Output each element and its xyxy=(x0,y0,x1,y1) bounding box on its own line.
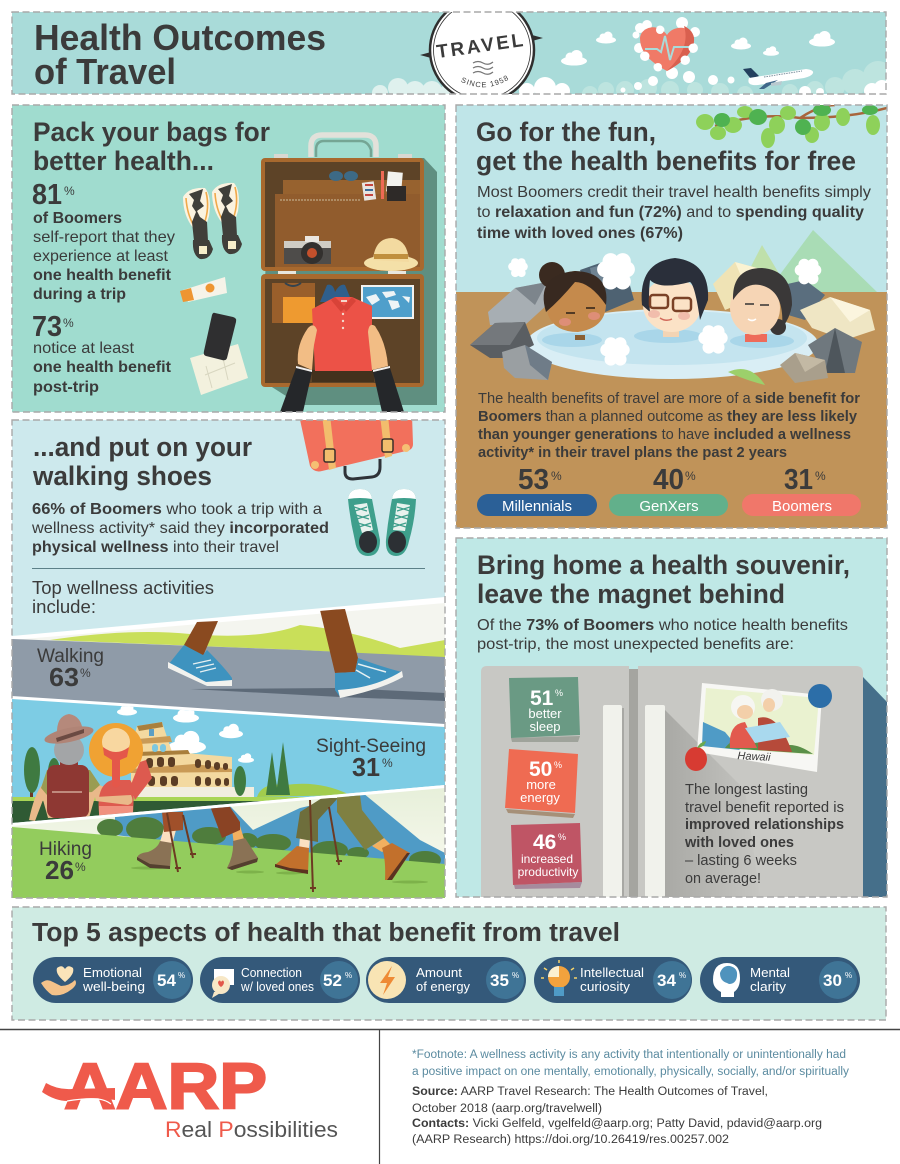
tourist couple xyxy=(29,714,152,821)
red polo xyxy=(312,297,372,371)
sticky: 46 percent increased productivity: increased xyxy=(521,852,573,866)
panel: top 5 aspects xyxy=(12,907,886,1020)
world map xyxy=(361,285,414,319)
hat xyxy=(364,257,418,271)
icon: blue magnet xyxy=(808,684,832,708)
heading: ...and put on your xyxy=(33,432,252,462)
heading xyxy=(33,117,270,176)
bushes xyxy=(97,817,441,864)
stat: 81 percent during a trip xyxy=(32,179,175,303)
walker left leg and shoe xyxy=(184,621,218,656)
icon: swim fins xyxy=(183,183,242,259)
text: relaxation and fun: to relaxation and fun (72%) and to spending quality xyxy=(477,204,864,221)
label: sight-seeing 31 percent: % xyxy=(382,756,393,770)
stat: genxers xyxy=(609,464,728,516)
title xyxy=(34,17,326,92)
icon: lightning bolt xyxy=(368,961,406,999)
text: unexpected benefits: Of the 73% of Boomers who notice health benefits xyxy=(477,617,848,634)
pill: amount of energy: of energy xyxy=(416,979,470,994)
pill: intellectual curiosity: curiosity xyxy=(580,979,631,994)
pill: intellectual curiosity: Intellectual xyxy=(580,965,644,980)
seated couple xyxy=(731,695,755,719)
sticky: 50 percent more energy: more xyxy=(526,777,556,792)
text: unexpected benefits xyxy=(477,617,848,653)
footnote: a positive impact on one mentally, emotionally, physically, socially, and/or spiritually xyxy=(412,1066,849,1078)
stat: boomers: 31 xyxy=(784,464,813,496)
label: hiking 26 percent: Hiking xyxy=(39,839,92,860)
stat: 81 percent during a trip: of Boomers xyxy=(33,210,122,227)
label: walking 63 percent: 63 xyxy=(49,662,79,692)
pill: emotional well-being: % xyxy=(178,971,185,980)
pill: mental clarity: Mental xyxy=(750,965,790,980)
pill: amount of energy: 35 xyxy=(490,971,509,990)
hiker trousers xyxy=(162,795,384,850)
icon: cloud heart xyxy=(632,17,700,72)
icon: sunscreen tube xyxy=(180,277,227,302)
sticky: 51 percent better sleep: better xyxy=(528,706,562,721)
sticky: 50 percent more energy: % xyxy=(554,760,562,770)
hiker skin and socks xyxy=(160,826,392,852)
stat: 81 percent during a trip: self-report that they xyxy=(33,229,175,246)
heading: walking shoes xyxy=(32,461,212,491)
panel: header banner xyxy=(11,11,887,95)
illustration: fridge xyxy=(481,666,887,897)
badge tagline: SINCE 1958 xyxy=(461,76,508,88)
stat: 81 percent during a trip: % xyxy=(64,184,75,198)
text: relaxation and fun: time with loved ones (67%) xyxy=(477,225,683,242)
pill: mental clarity xyxy=(700,957,860,1003)
stat: 73 percent post-trip: % xyxy=(63,316,74,330)
source and contacts: Contacts: Vicki Gelfeld, vgelfeld@aarp.org; Patty David, pdavid@aarp.org xyxy=(412,1118,822,1130)
text: physical wellness stat: 66% of Boomers who took a trip with a xyxy=(32,501,322,518)
icon: travel badge xyxy=(420,12,543,94)
heading xyxy=(32,432,252,491)
pill: amount of energy xyxy=(366,957,526,1003)
hands and sleeves xyxy=(298,325,317,370)
text: longest lasting benefit: with loved ones xyxy=(684,834,794,851)
sticky: 46 percent increased productivity xyxy=(511,823,582,889)
heading: Pack your bags for xyxy=(33,117,270,147)
stat: boomers: % xyxy=(815,469,826,483)
pill: intellectual curiosity: 34 xyxy=(657,971,676,990)
text: longest lasting benefit: – lasting 6 weeks xyxy=(685,852,797,869)
panel: walking shoes xyxy=(12,415,445,898)
label: hiking 26 percent: 26 xyxy=(45,855,74,885)
stat: genxers: GenXers xyxy=(639,498,699,515)
sticky: 50 percent more energy xyxy=(505,749,578,818)
shirt shadow xyxy=(312,370,374,382)
label: walking 63 percent xyxy=(37,646,104,692)
icon: speech bubble heart xyxy=(212,969,234,998)
icon: hand and heart xyxy=(41,966,76,995)
label: walking 63 percent: Walking xyxy=(37,646,104,667)
pill: amount of energy: Amount xyxy=(416,965,462,980)
illustration: hot spring xyxy=(456,104,887,528)
heading: get the health benefits for free xyxy=(476,146,856,176)
footnote xyxy=(412,1049,849,1078)
icon: airplane xyxy=(743,68,813,89)
foreground rocks right xyxy=(780,297,875,383)
stat: genxers: % xyxy=(685,469,696,483)
pill: intellectual curiosity: % xyxy=(679,971,686,980)
icon: head with brain xyxy=(713,963,740,997)
logo: AARP: AARP xyxy=(64,1050,267,1122)
label: hiking 26 percent xyxy=(39,839,92,885)
ground shadows xyxy=(131,866,428,884)
text: longest lasting benefit: The longest lasting xyxy=(685,781,808,798)
stat: 73 percent post-trip: 73 xyxy=(32,311,62,343)
text: side benefit: than younger generations to have included a wellness xyxy=(478,426,851,443)
stat: 81 percent during a trip: one health benefit xyxy=(33,267,172,284)
pill: connection with loved ones: w/ loved ones xyxy=(240,979,314,994)
stat: 73 percent post-trip: notice at least xyxy=(33,340,135,357)
label: walking 63 percent: % xyxy=(80,666,91,680)
icon: light bulb xyxy=(541,960,577,996)
stat: 73 percent post-trip xyxy=(32,311,172,396)
panel: go for the fun xyxy=(456,104,887,528)
icon: phone on map xyxy=(190,313,248,395)
text: physical wellness stat: physical wellness into their travel xyxy=(32,539,279,556)
pill: amount of energy: % xyxy=(512,971,519,980)
heading: better health... xyxy=(33,146,214,176)
stat: 81 percent during a trip: during a trip xyxy=(33,286,126,303)
label: sight-seeing 31 percent: 31 xyxy=(352,752,380,782)
sticky: 51 percent better sleep: % xyxy=(555,688,563,698)
pill: intellectual curiosity xyxy=(534,957,692,1003)
tree leaves xyxy=(696,104,887,148)
scene: sight-seeing band xyxy=(12,695,445,831)
pills, toothbrush, passport xyxy=(362,181,376,201)
source and contacts: (AARP Research) https://doi.org/10.26419/res.00257.002 xyxy=(412,1134,729,1146)
leaf xyxy=(728,369,765,385)
pill: connection with loved ones: 52 xyxy=(323,971,342,990)
sticky: 51 percent better sleep: 51 xyxy=(530,687,554,710)
trees xyxy=(24,742,350,799)
colosseum xyxy=(131,722,254,797)
label: hiking 26 percent: % xyxy=(75,860,86,874)
steam puffs xyxy=(508,258,528,277)
scene: hiking band xyxy=(12,785,445,898)
bather: woman xyxy=(730,268,792,342)
pill: emotional well-being: Emotional xyxy=(83,965,142,980)
caption: Hawaii xyxy=(737,750,771,764)
pill: connection with loved ones: % xyxy=(345,971,352,980)
pill: mental clarity: clarity xyxy=(750,979,787,994)
sticky: 51 percent better sleep: sleep xyxy=(529,719,561,734)
title: Health Outcomes xyxy=(34,17,326,58)
photo: Hawaii snapshot xyxy=(697,683,822,772)
label: sight-seeing 31 percent: Sight-Seeing xyxy=(316,736,426,757)
icon: apple magnet xyxy=(685,741,707,771)
logo tagline: Real Possibilities xyxy=(165,1117,338,1142)
badge word: TRAVEL xyxy=(435,30,527,63)
text: top wellness activities: Top wellness activities xyxy=(32,578,214,598)
heading xyxy=(476,117,856,176)
bather: girl xyxy=(539,262,606,340)
sunglasses xyxy=(329,171,358,181)
source and contacts: October 2018 (aarp.org/travelwell) xyxy=(412,1103,602,1115)
stat: 73 percent post-trip: post-trip xyxy=(33,379,99,396)
text: longest lasting benefit: travel benefit reported is xyxy=(685,799,844,816)
text: top wellness activities: include: xyxy=(32,597,96,617)
pill: emotional well-being: 54 xyxy=(157,971,176,990)
foreground rocks left xyxy=(470,282,552,380)
text: relaxation and fun xyxy=(477,184,871,242)
camera xyxy=(284,248,331,264)
sticky: 46 percent increased productivity: % xyxy=(558,832,566,842)
sticky: 46 percent increased productivity: productivity xyxy=(518,865,578,879)
stat: boomers: Boomers xyxy=(772,498,832,515)
stat: millennials xyxy=(477,464,597,516)
pill: mental clarity: % xyxy=(845,971,852,980)
pill: connection with loved ones xyxy=(200,957,360,1003)
text: longest lasting benefit: on average! xyxy=(685,870,761,887)
text: top wellness activities xyxy=(32,578,214,617)
pill: connection with loved ones: Connection xyxy=(241,965,302,980)
heading: Go for the fun, xyxy=(476,117,656,147)
icon: coral suitcase xyxy=(299,415,413,479)
text: relaxation and fun: Most Boomers credit their travel health benefits simply xyxy=(477,184,871,201)
stat: millennials: Millennials xyxy=(502,498,572,515)
text: physical wellness stat xyxy=(31,501,329,556)
footnote: *Footnote: A wellness activity is any activity that intentionally or unintentionally had xyxy=(412,1049,846,1061)
background rocks xyxy=(580,262,825,320)
icon: green sneakers xyxy=(348,489,416,556)
pill: emotional well-being: well-being xyxy=(82,979,145,994)
text: longest lasting benefit xyxy=(684,781,844,887)
pill: emotional well-being xyxy=(33,957,193,1003)
heading: leave the magnet behind xyxy=(477,579,785,609)
source and contacts xyxy=(412,1086,822,1146)
heading: Top 5 aspects of health that benefit from travel xyxy=(32,919,620,947)
stat: 81 percent during a trip: 81 xyxy=(32,179,62,211)
scene: walking band xyxy=(12,597,445,727)
text: side benefit: activity* in their travel plans the past 2 years xyxy=(478,444,787,461)
sticky: 51 percent better sleep xyxy=(509,677,580,742)
text: unexpected benefits: post-trip, the most unexpected benefits are: xyxy=(477,636,794,653)
walker right leg and shoe xyxy=(320,609,358,673)
hiker boots xyxy=(137,838,410,880)
sticky: 50 percent more energy: 50 xyxy=(529,758,552,781)
folded clothes xyxy=(272,283,315,323)
label: sight-seeing 31 percent xyxy=(316,736,426,782)
heading: Bring home a health souvenir, xyxy=(477,550,850,580)
illustration: open suitcase xyxy=(261,135,437,412)
pill: mental clarity: 30 xyxy=(823,971,842,990)
stat: millennials: 53 xyxy=(518,464,549,496)
text: side benefit: Boomers than a planned outcome as they are less likely xyxy=(478,408,858,425)
clouds along header bottom xyxy=(372,12,886,94)
panel: pack your bags xyxy=(12,105,445,412)
text: physical wellness stat: wellness activity* said they incorporated xyxy=(31,520,329,537)
sticky: 50 percent more energy: energy xyxy=(520,790,560,805)
trekking poles xyxy=(167,800,342,892)
sticky: 46 percent increased productivity: 46 xyxy=(533,831,556,854)
title: of Travel xyxy=(34,51,176,92)
panel: health souvenir xyxy=(456,538,887,897)
text: longest lasting benefit: improved relationships xyxy=(685,816,844,833)
stat: 81 percent during a trip: experience at least xyxy=(33,248,169,265)
text: side benefit xyxy=(478,390,860,461)
source and contacts: Source: AARP Travel Research: The Health Outcomes of Travel, xyxy=(412,1086,768,1098)
stat: genxers: 40 xyxy=(653,464,684,496)
heading xyxy=(477,550,850,609)
stat: 73 percent post-trip: one health benefit xyxy=(33,359,172,376)
text: side benefit: The health benefits of travel are more of a side benefit for xyxy=(478,390,860,407)
stat: boomers xyxy=(742,464,861,516)
stat: millennials: % xyxy=(551,469,562,483)
logo: AARP xyxy=(42,1050,338,1142)
bather: man with glasses xyxy=(642,258,708,337)
